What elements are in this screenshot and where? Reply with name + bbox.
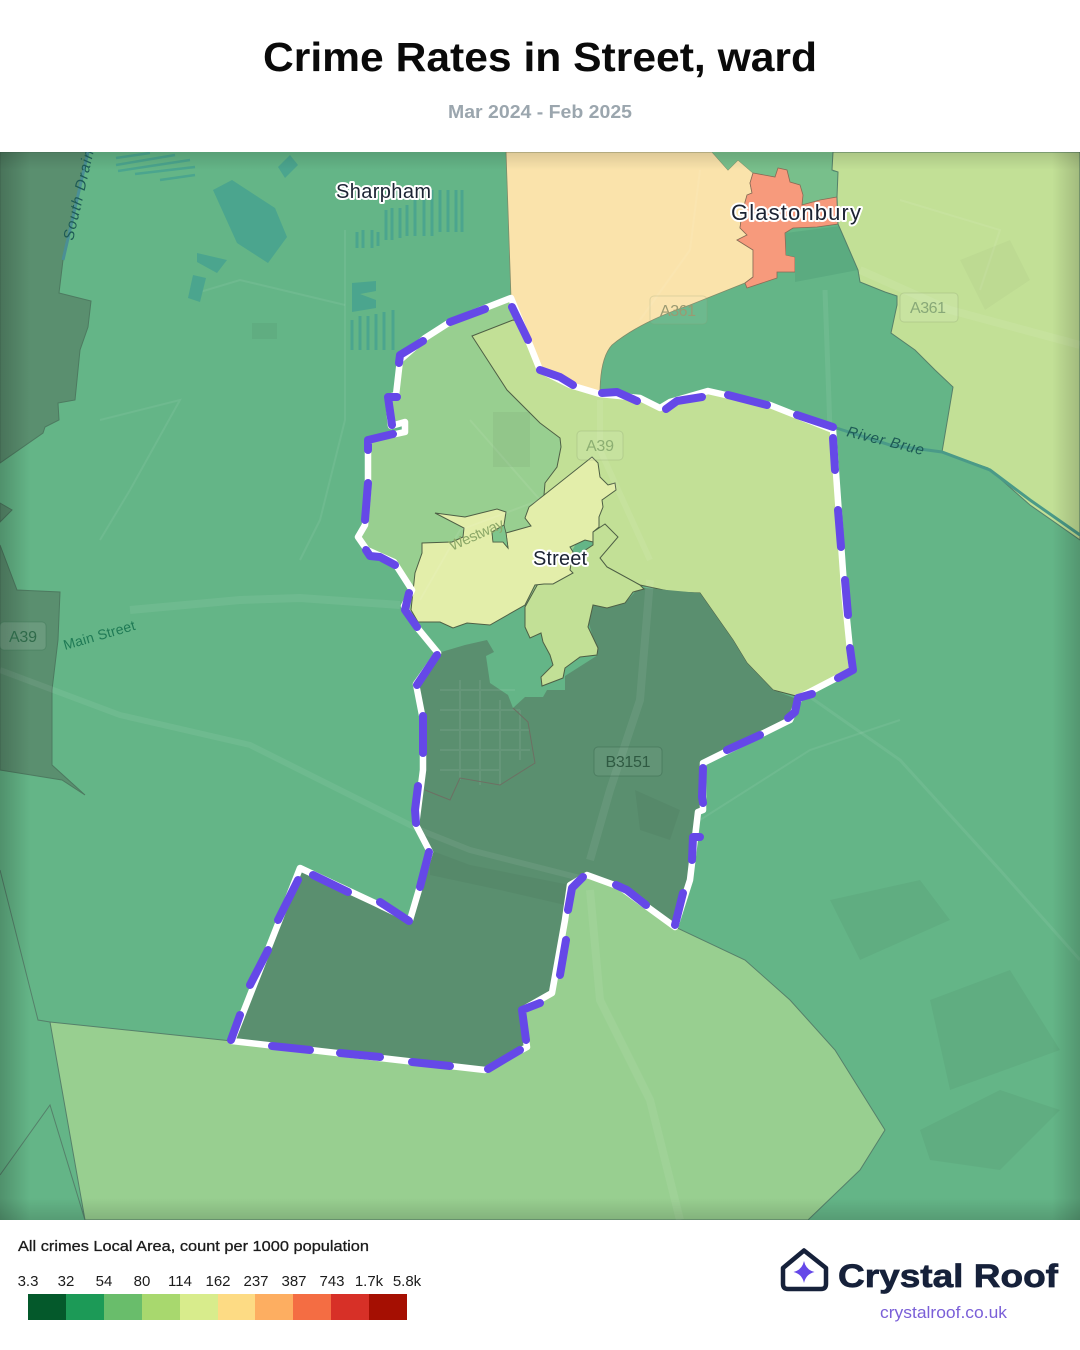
drain line (63, 152, 88, 260)
river Brue (833, 427, 1080, 535)
region: yellow-green south of centre (525, 524, 644, 686)
road shield A39 west: A39 (9, 629, 37, 646)
legend scale values: 54 (96, 1273, 112, 1290)
legend scale values: 1.7k (355, 1273, 384, 1290)
region: green area north of Glastonbury (712, 152, 838, 205)
choropleth map (0, 148, 1080, 1220)
legend scale values: 5.8k (393, 1273, 422, 1290)
road shield A361 east (900, 293, 958, 322)
icon: house with star (783, 1250, 826, 1289)
ward boundary purple dashes (231, 307, 853, 1069)
region: ward south green pocket (418, 622, 444, 630)
river label: River Brue (845, 423, 926, 459)
legend scale values: 80 (134, 1273, 150, 1290)
logo wordmark: Crystal Roof (838, 1258, 1058, 1294)
road shield A361 east: A361 (910, 300, 946, 317)
region: east yellow-green area (832, 152, 1080, 540)
legend (18, 1238, 422, 1320)
logo: Crystal Roof (783, 1250, 1058, 1322)
subtitle: date range: Mar 2024 - Feb 2025 (448, 102, 632, 122)
edge vignette (0, 152, 1080, 1220)
road shield A39 north (577, 431, 623, 460)
road shield A39 west (0, 622, 46, 650)
region: darker green patch south of Glastonbury (786, 226, 858, 282)
road shield B3151 (594, 747, 662, 776)
legend scale values: 162 (205, 1273, 231, 1290)
ward inner district line (425, 708, 535, 800)
legend scale values: 32 (58, 1273, 74, 1290)
place label Glastonbury: Glastonbury (731, 200, 861, 225)
road label Main Street: Main Street (61, 617, 137, 653)
legend colour bar (28, 1294, 407, 1320)
place label Street: Street (533, 548, 587, 570)
place label Sharpham: Sharpham (336, 181, 431, 203)
region: lower-left boundary lines (0, 870, 85, 1220)
legend scale values (18, 1273, 422, 1290)
region: peach area north of ward (506, 152, 753, 394)
legend scale values: 3.3 (18, 1273, 38, 1290)
drain label: South Drain (60, 148, 98, 242)
region: small green notch (492, 525, 508, 548)
legend scale values: 237 (243, 1273, 269, 1290)
title: Crime Rates in Street, ward (263, 34, 817, 80)
legend title: All crimes Local Area, count per 1000 population (18, 1238, 369, 1255)
legend scale values: 743 (319, 1273, 345, 1290)
ward boundary white base (232, 298, 852, 1070)
legend scale values: 114 (168, 1273, 192, 1290)
road shield B3151: B3151 (606, 754, 651, 771)
road shield A361 west: A361 (660, 303, 696, 320)
map darker field patches (493, 412, 530, 467)
website url: crystalroof.co.uk (880, 1304, 1008, 1322)
map roads (0, 170, 1080, 1220)
road shield A361 west (650, 296, 707, 324)
legend scale values: 387 (281, 1273, 307, 1290)
region: ward east yellow-green (472, 320, 852, 697)
region: ward south dark area (232, 588, 797, 1070)
region: far-west dark areas (0, 152, 91, 795)
map water and field features (116, 153, 462, 350)
region: ward north-west light green (362, 302, 575, 615)
region: pale yellow central Street area (411, 457, 616, 628)
region: southern light green area (50, 875, 885, 1220)
road shield A39 north: A39 (586, 438, 614, 455)
region: red Glastonbury area (737, 168, 838, 288)
road label Westway: Westway (447, 515, 507, 555)
